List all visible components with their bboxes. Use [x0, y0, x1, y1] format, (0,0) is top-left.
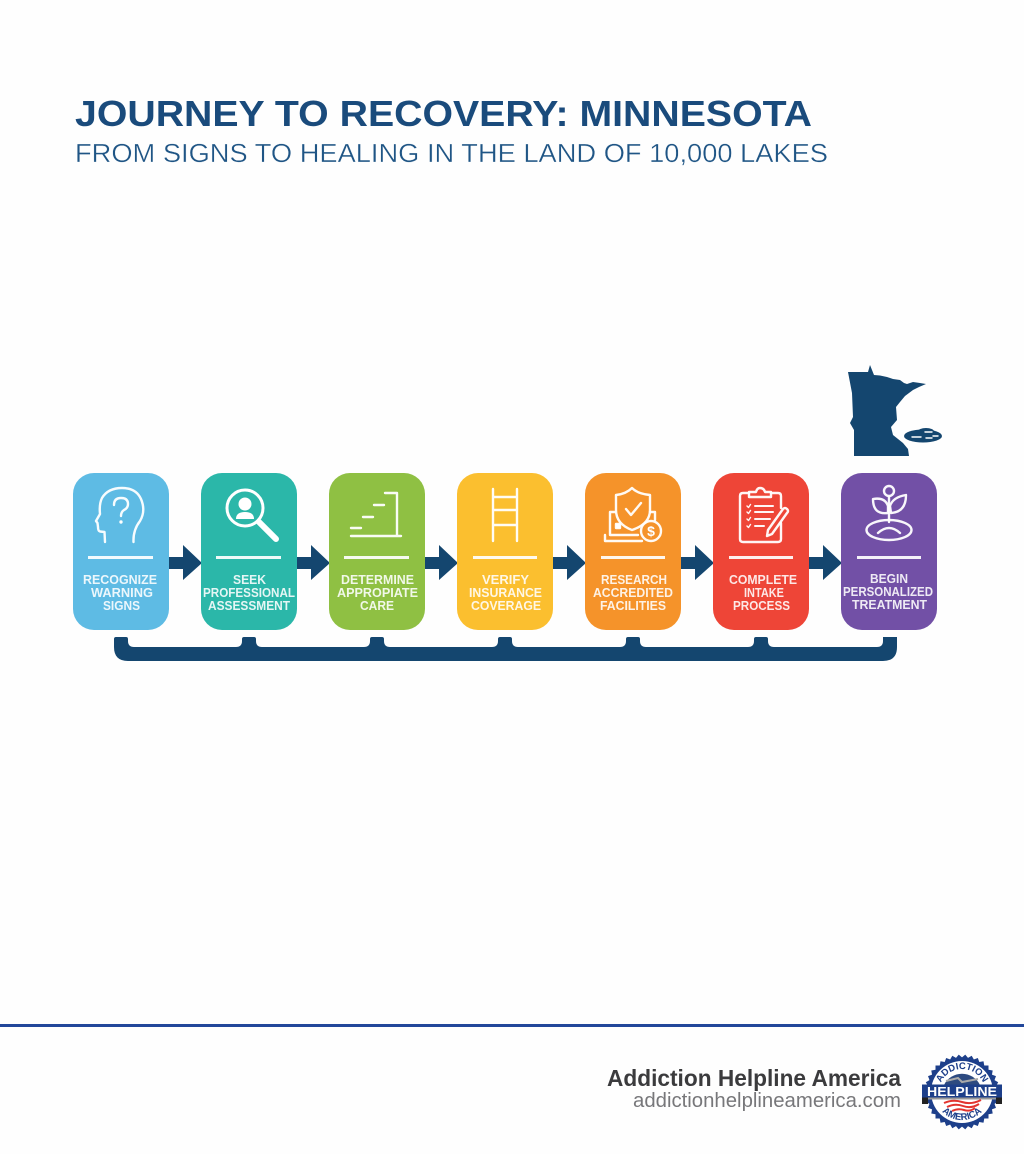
step 1 card: recognize warning signs — [73, 473, 169, 630]
step 5 card: research accredited facilities — [585, 473, 681, 630]
label: PROCESS — [733, 599, 790, 613]
icon: shield, document and coin: $ — [647, 523, 655, 539]
arrow 6 — [809, 545, 842, 580]
label: COMPLETE — [729, 573, 797, 587]
step 7 card: begin personalized treatment — [841, 473, 937, 630]
step 2 card: seek professional assessment — [201, 473, 297, 630]
footer website: addictionhelplineamerica.com — [633, 1090, 901, 1112]
label — [469, 573, 542, 613]
title: JOURNEY TO RECOVERY: MINNESOTA — [75, 93, 812, 134]
label: INTAKE — [744, 586, 784, 600]
footer divider line — [0, 1024, 1024, 1027]
label: SIGNS — [103, 599, 140, 613]
label: CARE — [360, 599, 394, 613]
icon: head with question mark — [96, 488, 143, 542]
logo badge: HELPLINE — [927, 1085, 997, 1099]
label — [83, 573, 157, 613]
label: RESEARCH — [601, 573, 667, 587]
icon: magnifier with person — [227, 490, 276, 539]
label: DETERMINE — [341, 573, 414, 587]
label — [593, 573, 673, 613]
label: ASSESSMENT — [208, 599, 290, 613]
logo badge: ADDICTION — [936, 1062, 988, 1082]
label — [729, 573, 797, 613]
subtitle: FROM SIGNS TO HEALING IN THE LAND OF 10,000 LAKES — [75, 138, 828, 168]
icon: sprout in soil — [866, 486, 912, 540]
label — [337, 573, 418, 613]
label: BEGIN — [870, 572, 908, 586]
logo badge: AMERICA — [942, 1108, 982, 1120]
step 6 card: complete intake process — [713, 473, 809, 630]
icon: stairs — [351, 493, 401, 536]
label: FACILITIES — [600, 599, 666, 613]
icon: shield, document and coin — [605, 488, 661, 541]
feedback bracket — [114, 637, 897, 661]
label: COVERAGE — [471, 599, 541, 613]
label: ACCREDITED — [593, 586, 673, 600]
label: PERSONALIZED — [843, 585, 933, 599]
icon: ladder — [493, 489, 517, 541]
label — [203, 573, 295, 613]
label: INSURANCE — [469, 586, 542, 600]
arrow 2 — [297, 545, 330, 580]
label: SEEK — [233, 573, 266, 587]
arrow 1 — [169, 545, 202, 580]
label: WARNING — [91, 586, 153, 600]
step 4 card: verify insurance coverage — [457, 473, 553, 630]
icon: Minnesota map with lakes — [848, 365, 942, 456]
label: VERIFY — [482, 573, 530, 587]
logo badge — [922, 1054, 1002, 1130]
footer brand name: Addiction Helpline America — [607, 1065, 901, 1091]
arrow 4 — [553, 545, 586, 580]
label: PROFESSIONAL — [203, 586, 295, 600]
icon: clipboard and pencil — [740, 488, 788, 542]
label: APPROPIATE — [337, 586, 418, 600]
arrow 5 — [681, 545, 714, 580]
label — [843, 572, 933, 612]
arrow 3 — [425, 545, 458, 580]
label: RECOGNIZE — [83, 573, 157, 587]
label: TREATMENT — [852, 598, 927, 612]
step 3 card: determine appropriate care — [329, 473, 425, 630]
